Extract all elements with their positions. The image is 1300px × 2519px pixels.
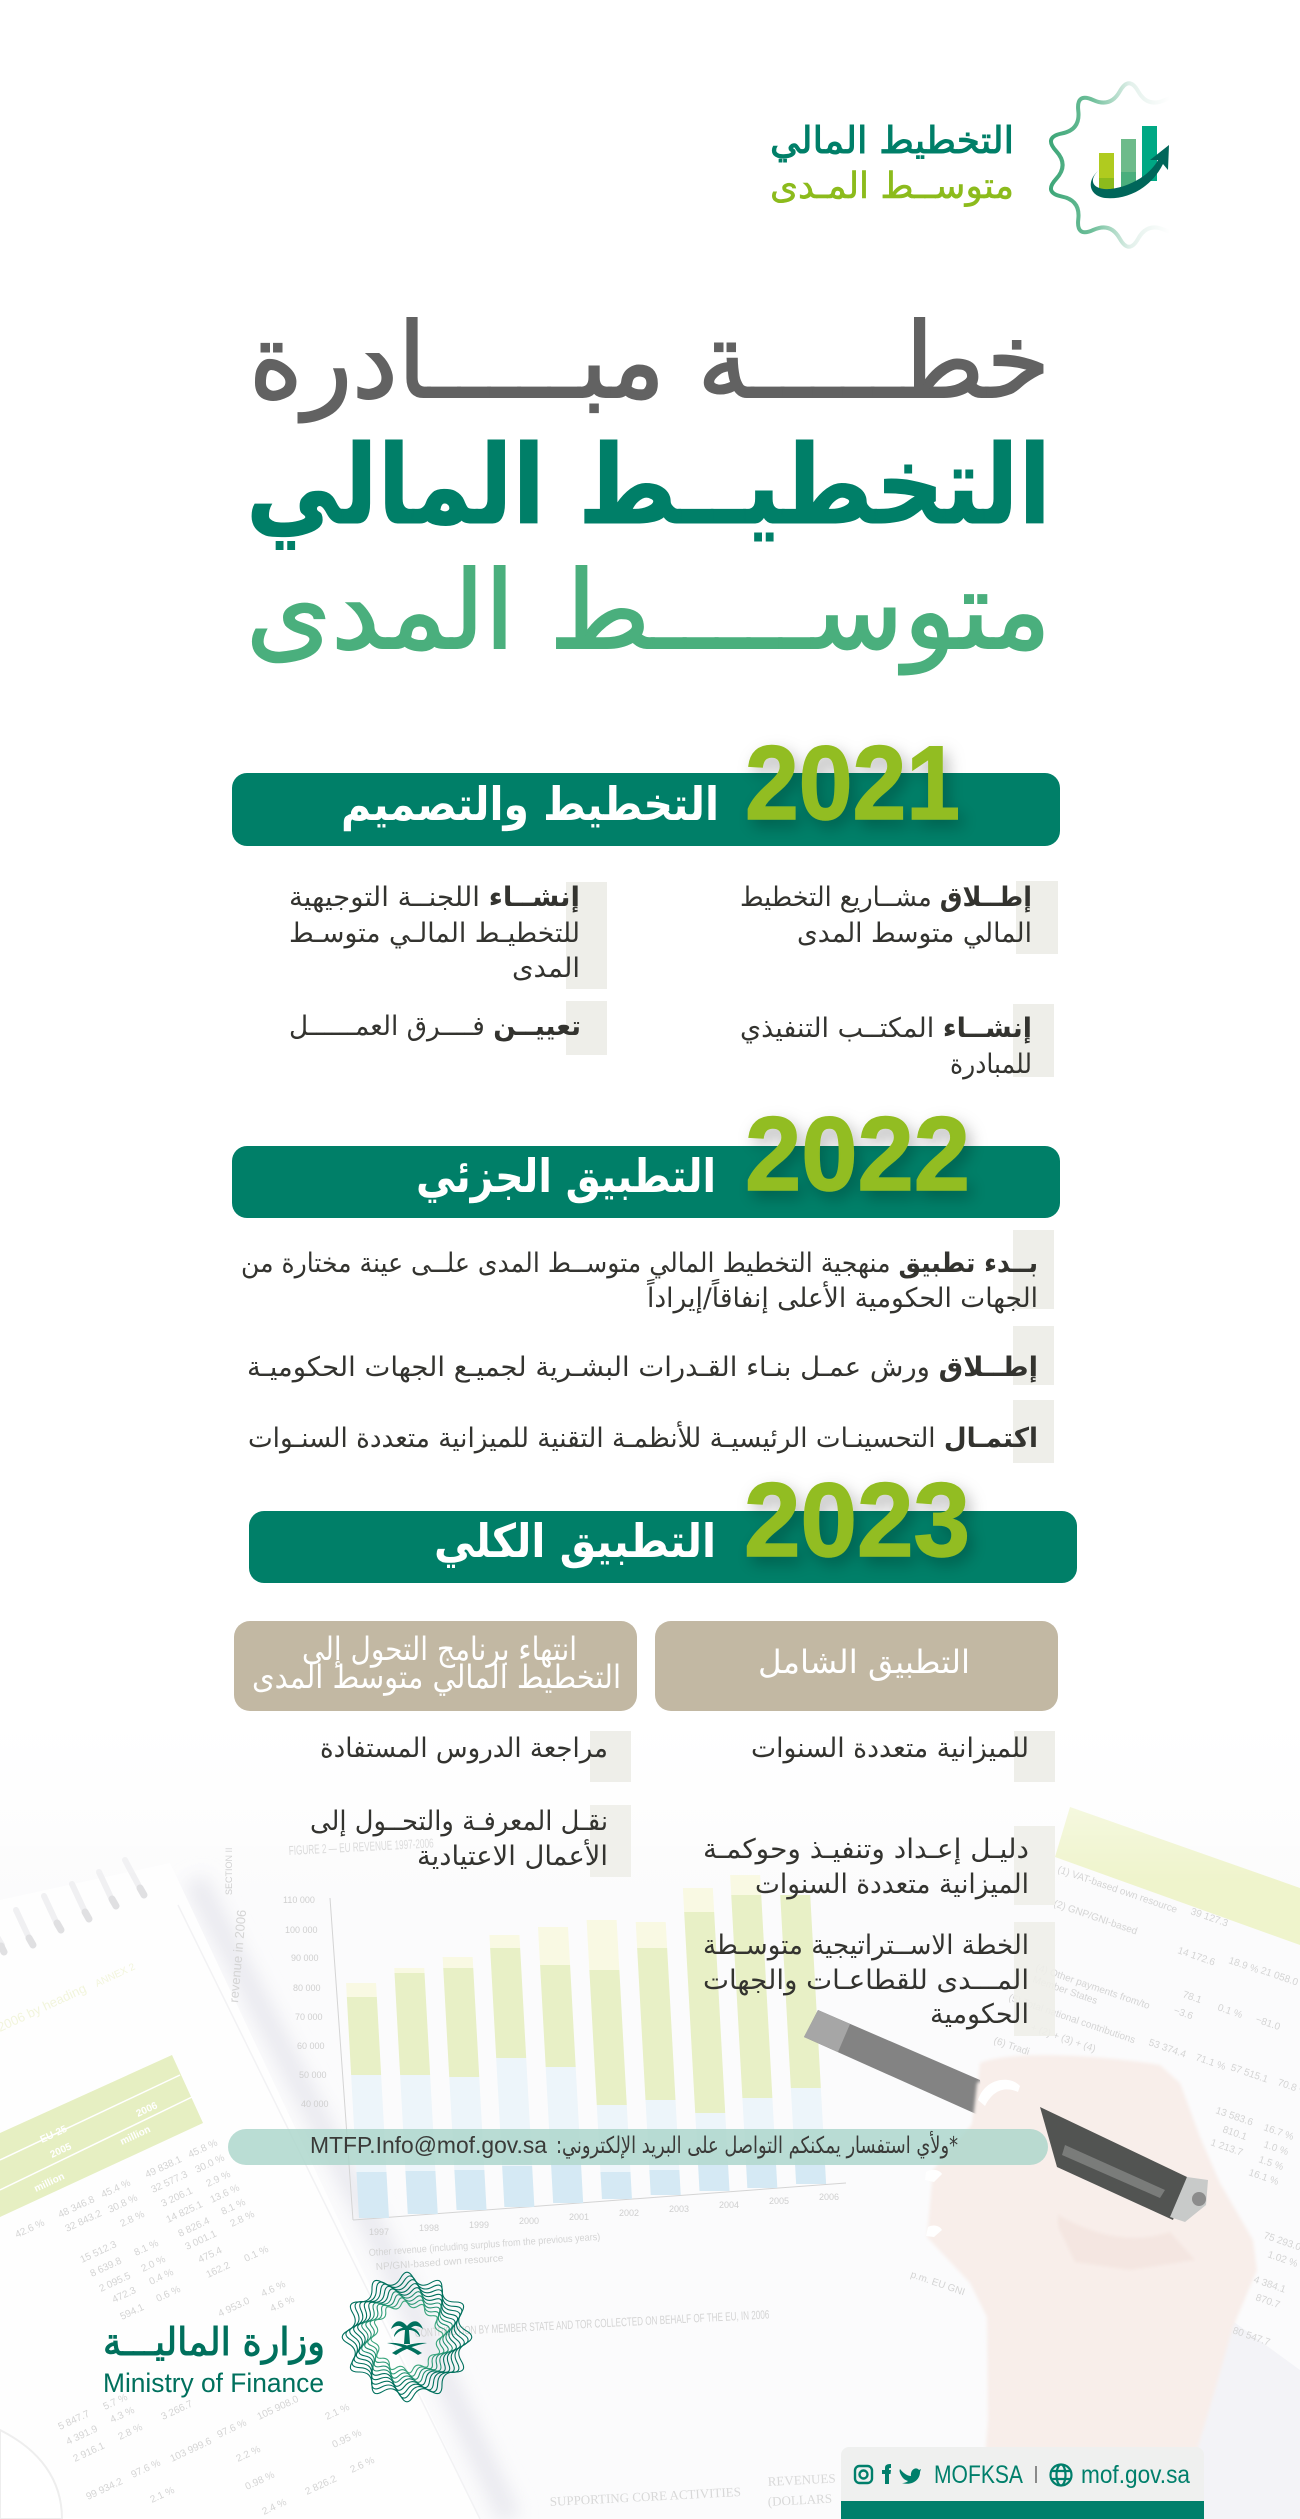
item: budget guide: دليـل إعـداد وتنفيـذ وحوكمـة bbox=[703, 1834, 1029, 1865]
table figures on notebook page: 3 266.7 bbox=[160, 2398, 195, 2423]
item: strategic plan: الحكومية bbox=[930, 1999, 1029, 2030]
table figures on notebook page: 2.8 % bbox=[229, 2209, 257, 2230]
bar chart in photo: revenue in 2006 bbox=[226, 1909, 249, 2003]
item: budget guide bbox=[703, 1826, 1055, 1905]
section bar 2023 bbox=[249, 1511, 1077, 1583]
bar chart in photo: 100 000 bbox=[285, 1925, 318, 1935]
document: right table page: p.m. EU GNI bbox=[909, 2269, 966, 2298]
year 2022: 2022 bbox=[745, 1096, 970, 1213]
document: right table page: 1.02 % bbox=[1266, 2249, 1299, 2270]
bar chart in photo: SECTION II bbox=[224, 1847, 234, 1895]
table figures on notebook page: 0.95 % bbox=[331, 2428, 364, 2451]
document: white notebook page on left: 2006 bbox=[135, 2100, 160, 2120]
bar chart in photo: (DOLLARS bbox=[767, 2491, 832, 2509]
ministry name arabic: وزارة الماليـــة bbox=[103, 2320, 325, 2365]
document: white notebook page on left bbox=[0, 1860, 480, 2519]
table figures on notebook page: 42.6 % bbox=[14, 2218, 47, 2241]
document: right table page: Member States bbox=[1031, 1974, 1099, 2007]
table figures on notebook page: 162.2 bbox=[205, 2260, 232, 2281]
section bar 2021 bbox=[232, 773, 1060, 846]
table figures on notebook page: 0.4 % bbox=[148, 2267, 176, 2288]
table figures on notebook page: 4.3 % bbox=[109, 2405, 137, 2426]
table figures on notebook page: 2.8 % bbox=[117, 2422, 145, 2443]
item: start methodology: بــدء تطبيق منهجية التخطيط المالي متوســط المدى علــى عينة مختارة من bbox=[241, 1248, 1038, 1279]
logo badge ring bbox=[1051, 83, 1207, 247]
pen barrel black section bbox=[1040, 2107, 1187, 2220]
document: right table page: −81.0 bbox=[1254, 2014, 1282, 2033]
table figures on notebook page: 2.6 % bbox=[349, 2455, 377, 2476]
bar chart in photo: FIGURE 2 — EU REVENUE 1997-2006 bbox=[288, 1835, 434, 1858]
item: start methodology bbox=[241, 1230, 1054, 1314]
section 2023: full implementation bbox=[234, 1462, 1077, 2036]
table figures on notebook page: 103 999.6 bbox=[169, 2436, 214, 2465]
document: right table page: 18.9 % bbox=[1227, 1955, 1260, 1976]
item: strategic plan: الخطة الاســتراتيجية متوسـطة bbox=[703, 1930, 1029, 1961]
table figures on notebook page: 475.4 bbox=[197, 2245, 224, 2266]
document: right table page: 0.1 % bbox=[1216, 2002, 1244, 2021]
title line 1: خطـــــة مبـــــادرة bbox=[249, 300, 1050, 422]
table figures on notebook page: 30.0 % bbox=[194, 2153, 227, 2176]
emblem: palm and crossed swords bbox=[387, 2321, 427, 2355]
document: right table page: 16.7 % bbox=[1262, 2122, 1295, 2143]
table figures on notebook page: 2 095.5 bbox=[98, 2270, 133, 2295]
document: right table page: 810.1 bbox=[1221, 2124, 1249, 2143]
bar chart in photo: 2003 bbox=[669, 2204, 689, 2214]
logo text line 1: التخطيط المالي bbox=[770, 119, 1014, 162]
item: capacity workshops: إطــلاق ورش عمـل بنـاء القـدرات البشـرية لجميـع الجهات الحكوميـة bbox=[247, 1352, 1038, 1383]
background photo: faded documents, chart, pen and hand bbox=[0, 1807, 1300, 2519]
rosette emblem bbox=[330, 2260, 484, 2414]
table figures on notebook page: 2.0 % bbox=[140, 2254, 168, 2275]
table figures on notebook page: 4 953.0 bbox=[217, 2295, 252, 2320]
icon: instagram bbox=[855, 2466, 872, 2483]
bar chart in photo: 1997 bbox=[369, 2227, 389, 2237]
item: executive office bbox=[740, 1004, 1054, 1080]
table figures on notebook page: 2.4 % bbox=[261, 2497, 289, 2518]
logo: medium-term fiscal planning bbox=[770, 83, 1207, 247]
shadow beside notebook page bbox=[195, 1880, 510, 2519]
bar chart in photo: 110 000 bbox=[283, 1895, 315, 1905]
table figures on notebook page: 3 206.1 bbox=[160, 2185, 195, 2210]
bar heading 2023: التطبيق الكلي bbox=[434, 1514, 716, 1568]
bar chart in photo: 2001 bbox=[569, 2212, 589, 2222]
document: white notebook page on left: 2005 bbox=[49, 2141, 74, 2161]
document: right table page: 1.0 % bbox=[1262, 2139, 1290, 2158]
table figures on notebook page: 32 577.3 bbox=[150, 2169, 190, 2196]
table figures on notebook page: 0.1 % bbox=[243, 2244, 271, 2265]
bar chart in photo: 2005 bbox=[769, 2196, 789, 2206]
item: multi-year budget bbox=[751, 1731, 1055, 1782]
item: knowledge transfer: الأعمال الاعتيادية bbox=[417, 1838, 608, 1872]
title line 3: متوســـــط المدى bbox=[246, 549, 1051, 675]
table figures on notebook page: 594.1 bbox=[119, 2302, 146, 2323]
table figures on notebook page: 8.1 % bbox=[220, 2197, 248, 2218]
bar chart in photo: 90 000 bbox=[291, 1953, 319, 1963]
website: mof.gov.sa bbox=[1081, 2461, 1190, 2489]
item: steering committee: إنشــاء اللجنــة التوجيهية bbox=[289, 882, 580, 913]
table figures on notebook page bbox=[14, 2138, 377, 2518]
table figures on notebook page: 14 825.1 bbox=[165, 2199, 205, 2226]
item: multi-year budget: للميزانية متعددة السنوات bbox=[751, 1733, 1029, 1764]
contact note pill: MTFP.Info@mof.gov.sa bbox=[310, 2132, 547, 2158]
table figures on notebook page: 4 391.9 bbox=[65, 2423, 100, 2448]
bar chart in photo: 80 000 bbox=[293, 1983, 321, 1993]
item: appoint working teams bbox=[289, 1001, 607, 1055]
document: right table page: (2) GNP/GNI-based bbox=[1052, 1898, 1139, 1937]
table figures on notebook page: 32 843.2 bbox=[64, 2208, 104, 2235]
table figures on notebook page: 2.8 % bbox=[119, 2209, 147, 2230]
document: right table page: 870.7 bbox=[1254, 2292, 1282, 2311]
item: complete improvements bbox=[248, 1400, 1054, 1463]
table figures on notebook page: 13.6 % bbox=[209, 2183, 242, 2206]
icon: twitter bbox=[900, 2468, 921, 2484]
box: comprehensive implementation: التطبيق الشامل bbox=[758, 1643, 970, 1681]
document: right table page: −3.6 bbox=[1172, 2005, 1195, 2022]
item: lessons learned: مراجعة الدروس المستفادة bbox=[320, 1733, 608, 1764]
table figures on notebook page: 472.3 bbox=[111, 2285, 138, 2306]
spiral binding rings bbox=[0, 1860, 144, 1952]
box: end of transition programme: انتهاء برنامج التحول إلى bbox=[302, 1630, 577, 1668]
document: right table page: 78.1 bbox=[1181, 1989, 1203, 2006]
document: right table page: (4) Other payments from/to bbox=[1034, 1962, 1152, 2012]
table figures on notebook page: 3 001.1 bbox=[184, 2228, 219, 2253]
table figures on notebook page: 8 826.4 bbox=[177, 2215, 212, 2240]
bar chart in photo: CONTRIBUTION BY MEMBER STATE AND TOR COLLECTED ON BEHALF OF THE EU, IN 2006 bbox=[414, 2307, 770, 2340]
ministry name english: Ministry of Finance bbox=[103, 2368, 324, 2398]
document: right table page: 57 515.1 bbox=[1229, 2062, 1270, 2086]
item: launch projects: المالي متوسط المدى bbox=[797, 918, 1032, 949]
Ministry of Finance logo bbox=[103, 2260, 484, 2414]
item: executive office: إنشــاء المكتــب التنفيذي bbox=[740, 1013, 1032, 1044]
box: end of transition programme bbox=[234, 1621, 637, 1711]
document: white notebook page on left: million bbox=[33, 2171, 66, 2195]
item: steering committee: للتخطيـط المالـي متوسـط bbox=[289, 918, 580, 949]
item: appoint working teams: تعييــن فــــرق العمــــــل bbox=[289, 1011, 581, 1042]
footer contact panel bbox=[841, 2447, 1204, 2519]
document: right table page: (6) Tradi bbox=[992, 2035, 1031, 2058]
bar chart in photo: 60 000 bbox=[297, 2041, 325, 2051]
table figures on notebook page: 5 847.7 bbox=[57, 2408, 92, 2433]
table figures on notebook page: 49 838.1 bbox=[144, 2154, 184, 2181]
table figures on notebook page: 105 908.0 bbox=[256, 2394, 301, 2423]
bar chart in photo: 1998 bbox=[419, 2223, 439, 2233]
table figures on notebook page: 2 916.1 bbox=[72, 2440, 107, 2465]
section bar 2022 bbox=[232, 1146, 1060, 1218]
bar chart in photo: SUPPORTING CORE ACTIVITIES bbox=[549, 2484, 741, 2509]
item: capacity workshops bbox=[247, 1326, 1054, 1385]
document: right table page: 1 213.7 bbox=[1209, 2137, 1245, 2159]
table figures on notebook page: 4.6 % bbox=[269, 2294, 297, 2315]
year 2023: 2023 bbox=[744, 1462, 970, 1579]
logo text line 2: متوســط المـدى bbox=[770, 166, 1014, 207]
green table header on notebook bbox=[0, 2055, 203, 2217]
item: launch projects: إطــلاق مشــاريع التخطيط bbox=[740, 882, 1032, 913]
table figures on notebook page: 30.8 % bbox=[107, 2193, 140, 2216]
icon: globe bbox=[1050, 2464, 1072, 2486]
item: complete improvements: اكتمـال التحسينـات الرئيسيـة للأنظمـة التقنية للميزانية متعددة السنـوات bbox=[248, 1420, 1038, 1454]
document: right table page: 39 127.3 bbox=[1189, 1906, 1230, 1930]
section 2021: planning and design bbox=[232, 725, 1060, 1080]
item: budget guide: الميزانية متعددة السنوات bbox=[755, 1869, 1029, 1900]
table figures on notebook page: 97.6 % bbox=[130, 2458, 163, 2481]
document: right table page: (1) VAT-based own resource bbox=[1056, 1864, 1179, 1916]
bar chart in photo: 1999 bbox=[469, 2220, 489, 2230]
bar chart in photo: 2000 bbox=[519, 2216, 539, 2226]
document: right table page: 71.1 % bbox=[1194, 2052, 1227, 2073]
item: launch projects bbox=[740, 881, 1058, 954]
table figures on notebook page: 45.4 % bbox=[100, 2178, 133, 2201]
item: knowledge transfer: نقـل المعرفـة والتحــول إلى bbox=[310, 1806, 608, 1837]
table figures on notebook page: 8 639.8 bbox=[89, 2255, 124, 2280]
table figures on notebook page: 99 934.2 bbox=[85, 2476, 125, 2503]
contact note pill: ‏*ولأي استفسار يمكنكم التواصل على البريد الإلكتروني:‏ bbox=[556, 2131, 958, 2159]
table figures on notebook page: 97.6 % bbox=[216, 2418, 249, 2441]
document: white notebook page on left: EU-25 bbox=[39, 2124, 69, 2146]
table figures on notebook page: 15 512.3 bbox=[79, 2239, 119, 2266]
section 2022: partial implementation bbox=[232, 1096, 1060, 1463]
document: right table page: 21 058.0 bbox=[1259, 1965, 1300, 1989]
box: end of transition programme: التخطيط المالي متوسط المدى bbox=[252, 1658, 621, 1696]
bar chart in photo: REVENUES bbox=[767, 2470, 836, 2489]
item: start methodology: الجهات الحكومية الأعلى إنفاقاً/إيراداً bbox=[646, 1278, 1038, 1314]
bar heading 2021: التخطيط والتصميم bbox=[341, 777, 719, 831]
table figures on notebook page: 48 346.8 bbox=[57, 2194, 97, 2221]
pen barrel carbon section bbox=[804, 2010, 985, 2118]
table figures on notebook page: 2.1 % bbox=[149, 2485, 177, 2506]
item: lessons learned bbox=[320, 1731, 631, 1782]
document: right table page: (5) Total national contributions bbox=[1007, 1992, 1137, 2046]
table figures on notebook page: 4.6 % bbox=[260, 2279, 288, 2300]
table figures on notebook page: 0.6 % bbox=[155, 2284, 183, 2305]
table figures on notebook page: 8.1 % bbox=[133, 2238, 161, 2259]
document: right table page: 53 374.4 bbox=[1147, 2037, 1188, 2061]
table figures on notebook page: 5.7 % bbox=[102, 2392, 130, 2413]
main title bbox=[246, 300, 1051, 675]
box: comprehensive implementation bbox=[655, 1621, 1058, 1711]
document: right table page: + (2) + (3) + (4) bbox=[1029, 2022, 1097, 2055]
table figures on notebook page: 2 826.2 bbox=[304, 2473, 339, 2498]
table figures on notebook page: 2.1 % bbox=[324, 2402, 352, 2423]
icon: facebook bbox=[882, 2464, 891, 2484]
table figures on notebook page: 45.8 % bbox=[187, 2138, 220, 2161]
table figures on notebook page: 0.98 % bbox=[244, 2470, 277, 2493]
table figures on notebook page: 2.2 % bbox=[235, 2444, 263, 2465]
bar chart in photo: 2002 bbox=[619, 2208, 639, 2218]
document: right table page: 16.1 % bbox=[1247, 2167, 1280, 2188]
document: right table page: 13 583.6 bbox=[1214, 2105, 1255, 2129]
bar chart in photo: 70 000 bbox=[295, 2012, 323, 2022]
document: right table page: 80 547.7 bbox=[1231, 2325, 1272, 2349]
document: white notebook page on left: million bbox=[119, 2124, 152, 2148]
item: executive office: للمبادرة bbox=[950, 1049, 1032, 1080]
document: right table page bbox=[909, 1807, 1300, 2349]
table figures on notebook page: 2.9 % bbox=[205, 2169, 233, 2190]
bar chart in photo: 40 000 bbox=[301, 2099, 329, 2109]
document: white notebook page on left: ANNEX 2 bbox=[94, 1961, 137, 1990]
bar chart in photo: Other revenue (including surplus from the previous years) bbox=[368, 2232, 601, 2259]
bar chart in photo: 50 000 bbox=[299, 2070, 327, 2080]
hand holding pen bbox=[804, 2010, 1257, 2447]
bar chart in photo: 2006 bbox=[819, 2192, 839, 2202]
document: right table page: 4 384.1 bbox=[1252, 2274, 1288, 2296]
title line 2: التخطيــط المالي bbox=[246, 422, 1051, 549]
year 2021: 2021 bbox=[745, 725, 960, 842]
item: strategic plan bbox=[703, 1922, 1055, 2036]
thumb over pen bbox=[972, 2080, 985, 2118]
item: knowledge transfer bbox=[310, 1805, 631, 1877]
item: steering committee: المدى bbox=[512, 953, 580, 984]
bar chart in photo: 2004 bbox=[719, 2200, 739, 2210]
document: right table page: 1.5 % bbox=[1257, 2154, 1285, 2173]
bar chart in photo bbox=[224, 1835, 846, 2509]
document: right table page: 14 172.6 bbox=[1176, 1945, 1217, 1969]
bar heading 2022: التطبيق الجزئي bbox=[416, 1149, 716, 1203]
bar chart in photo: NP/GNI-based own resource bbox=[375, 2253, 504, 2273]
logo icon: rising bars and arrow bbox=[1091, 126, 1169, 198]
contact note pill bbox=[228, 2129, 1048, 2165]
item: strategic plan: المـــدى للقطاعـات والجهات bbox=[703, 1965, 1029, 1996]
item: steering committee bbox=[289, 882, 607, 989]
handle: MOFKSA bbox=[934, 2461, 1023, 2489]
